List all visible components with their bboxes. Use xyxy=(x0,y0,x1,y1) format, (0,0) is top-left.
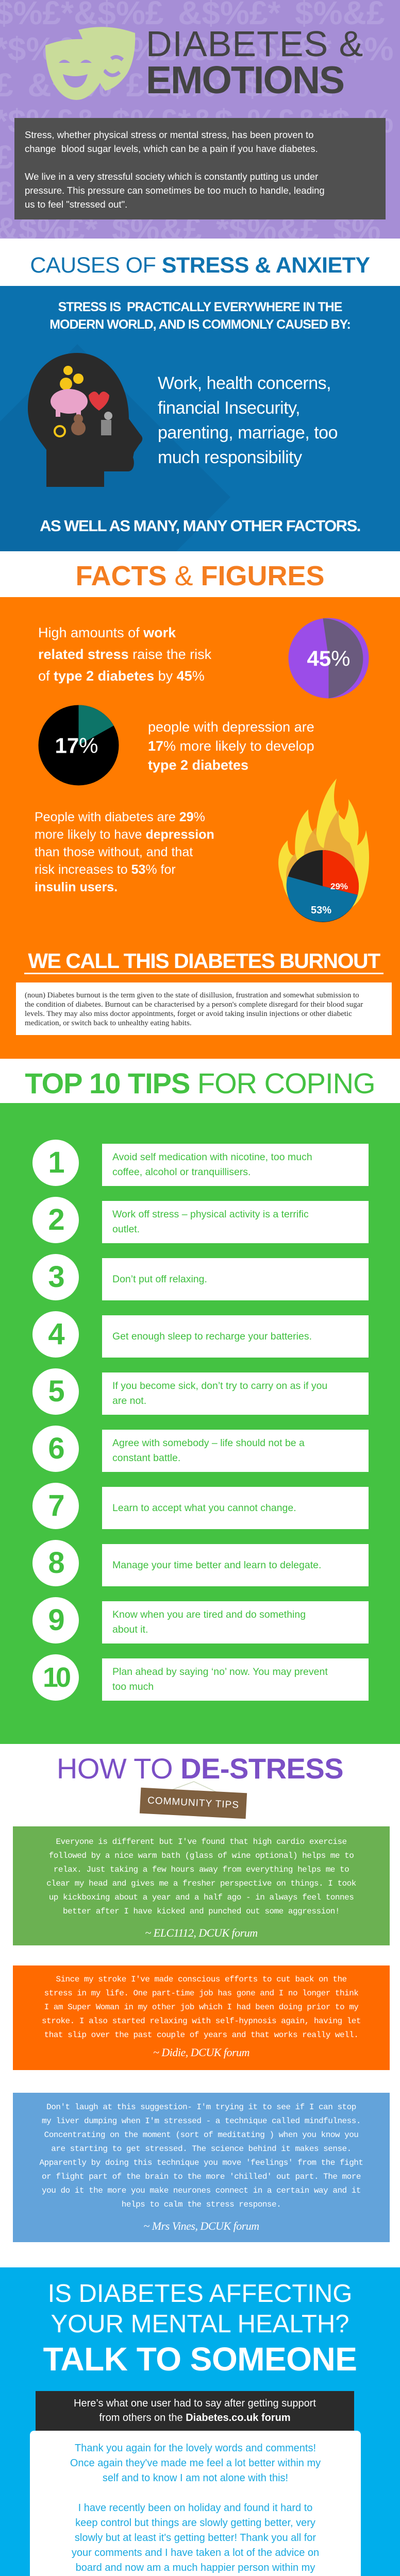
fact 2 text xyxy=(148,719,314,773)
tip 7: 7 xyxy=(48,1489,63,1522)
pie chart 17%: 17% xyxy=(55,734,98,757)
community tip: green: Everyone is different but I've found that high cardio exercise xyxy=(56,1837,347,1846)
text: causes list: much responsibility xyxy=(158,448,302,467)
community tip: orange: Since my stroke I've made conscious efforts to cut back on the xyxy=(56,1975,347,1984)
tip 9: Know when you are tired and do something xyxy=(112,1609,306,1620)
panel: talk to someone xyxy=(0,2267,400,2576)
tip 3 xyxy=(32,1254,369,1300)
speech bubble quote: board and now am a much happier person within my xyxy=(76,2562,315,2573)
intro text box: Stress, whether physical stress or mental stress, has been proven to xyxy=(25,129,313,140)
shadow xyxy=(0,344,230,650)
tip 9 xyxy=(32,1597,369,1643)
community tip: orange: stroke. I also started relaxing with self-hypnosis again, having let xyxy=(42,2016,361,2026)
heading: talk to someone: TALK TO SOMEONE xyxy=(43,2341,357,2378)
community tip: blue: or flight part of the brain to the more 'chilled' out part. The more xyxy=(42,2172,361,2181)
community tip: blue: Concentrating on the moment (sort of meditating ) when you know you xyxy=(44,2130,358,2140)
speech bubble quote: your comments and I have taken a lot of the advice on xyxy=(72,2547,319,2558)
tip 6: constant battle. xyxy=(112,1452,180,1464)
intro box: Here’s what one user had to say after getting support xyxy=(74,2398,316,2409)
community tip: green: clear my head and gives me a fresher perspective on things. I took xyxy=(46,1879,356,1888)
intro text box: We live in a very stressful society which is constantly putting us under xyxy=(25,171,318,182)
tip 5: If you become sick, don’t try to carry on as if you xyxy=(112,1380,327,1392)
subheading xyxy=(49,300,351,332)
community tip: green: ~ ELC1112, DCUK forum xyxy=(145,1926,258,1939)
subheading: MODERN WORLD, AND IS COMMONLY CAUSED BY: xyxy=(49,317,351,332)
community tip: orange: stress in my life. One part-time job has gone and I no longer think xyxy=(44,1989,358,1998)
tip 1: Avoid self medication with nicotine, too much xyxy=(112,1151,312,1163)
icon: head with worries xyxy=(28,353,142,487)
tip 4: Get enough sleep to recharge your batteries. xyxy=(112,1330,312,1342)
fact 1 text: High amounts of work xyxy=(38,625,176,640)
tip 6: Agree with somebody – life should not be a xyxy=(112,1437,305,1449)
fact 1 text: of type 2 diabetes by 45% xyxy=(38,668,205,684)
pie chart 45%: 45% xyxy=(307,646,351,671)
fact 1 text xyxy=(38,625,211,684)
community tip: blue: you do it the more you make neurones connect in a certain way and it xyxy=(42,2186,361,2195)
community tip: blue: Don't laugh at this suggestion- I'm trying it to see if I can stop xyxy=(46,2103,356,2112)
community tip: orange: ~ Didie, DCUK forum xyxy=(153,2046,249,2059)
tip 10 xyxy=(32,1654,369,1701)
heading: question: YOUR MENTAL HEALTH? xyxy=(51,2310,349,2338)
fact 3 text: more likely to have depression xyxy=(35,827,214,842)
sign: community tips xyxy=(139,1781,247,1819)
heading: question xyxy=(48,2280,352,2338)
definition box: (noun) Diabetes burnout is the term given to the state of disillusion, frustration and somewhat submission to xyxy=(25,991,359,999)
speech bubble quote: I have recently been on holiday and found it hard to xyxy=(78,2502,312,2514)
speech bubble quote xyxy=(30,2431,361,2576)
intro box xyxy=(36,2391,354,2431)
panel: causes xyxy=(0,286,400,551)
fact 3 text: risk increases to 53% for xyxy=(35,862,176,877)
tip 5: 5 xyxy=(48,1375,63,1408)
subheading: STRESS IS PRACTICALLY EVERYWHERE IN THE xyxy=(58,300,342,314)
icon: fire with pie chart: 29% xyxy=(330,882,348,891)
tip 6 xyxy=(32,1426,369,1472)
intro text box: us to feel "stressed out". xyxy=(25,199,127,210)
title xyxy=(146,24,363,101)
heading: how to de-stress: HOW TO DE-STRESS xyxy=(57,1752,343,1785)
community tip: green: relax. Just taking a few hours away from everything helps me to xyxy=(54,1865,349,1874)
heading: diabetes burnout: WE CALL THIS DIABETES BURNOUT xyxy=(28,949,380,973)
community tip: green: better after I have kicked and punched out some aggression! xyxy=(63,1907,340,1916)
community tip: blue: Apparently by doing this technique you move 'feelings' from the fight xyxy=(39,2158,363,2167)
tip 10: 10 xyxy=(43,1662,69,1693)
community tip: blue xyxy=(13,2093,390,2242)
tip 8 xyxy=(32,1540,369,1586)
community tip: orange: that slip over the past couple of years and that works really well. xyxy=(44,2030,358,2040)
community tip: blue: helps to calm the stress response. xyxy=(122,2200,281,2209)
tip 1: coffee, alcohol or tranquillisers. xyxy=(112,1166,251,1178)
tip 1: 1 xyxy=(48,1146,63,1179)
intro text box xyxy=(14,118,386,219)
icon: fire with pie chart xyxy=(278,778,369,922)
community tip: blue: ~ Mrs Vines, DCUK forum xyxy=(143,2219,259,2232)
community tip: blue: my liver dumping when I'm stressed - a technique called mindfulness. xyxy=(42,2116,361,2126)
text: causes list: parenting, marriage, too xyxy=(158,423,338,443)
title: EMOTIONS xyxy=(146,58,344,101)
tip 7 xyxy=(32,1483,369,1529)
speech bubble quote: self and to know I am not alone with this! xyxy=(103,2472,288,2484)
panel: tips xyxy=(0,1103,400,1744)
fact 3 text xyxy=(35,810,214,894)
tip 10: too much xyxy=(112,1681,154,1692)
speech bubble quote: slowly but at least it's getting better! Thank you all for xyxy=(75,2532,316,2544)
tip 2: outlet. xyxy=(112,1224,140,1235)
community tip: orange: I am Super Woman in my other job which I had been doing prior to my xyxy=(44,2003,358,2012)
community tip: blue: are starting to get stressed. The science behind it makes sense. xyxy=(51,2144,352,2154)
fact 3 text: insulin users. xyxy=(35,880,118,894)
speech bubble quote: Once again they've made me feel a lot better within my xyxy=(70,2458,321,2469)
definition box: levels. They may also miss doctor appointments, forget or avoid taking insulin injections or other diabetic xyxy=(25,1010,352,1018)
community tip: green: up kickboxing about a year and a half ago - in always feel tonnes xyxy=(49,1893,354,1902)
tip 10: Plan ahead by saying ‘no’ now. You may prevent xyxy=(112,1666,328,1677)
footer line: AS WELL AS MANY, MANY OTHER FACTORS. xyxy=(40,517,360,535)
fact 2 text: 17% more likely to develop xyxy=(148,738,314,754)
definition box: the condition of diabetes. Burnout can be characterised by a person's complete disregard for their blood sugar xyxy=(25,1001,363,1009)
fact 3 text: than those without, and that xyxy=(35,845,193,859)
intro box: from others on the Diabetes.co.uk forum xyxy=(99,2412,291,2424)
tip 2: Work off stress – physical activity is a terrific xyxy=(112,1209,309,1220)
sign: community tips: COMMUNITY TIPS xyxy=(147,1795,239,1811)
text: causes list xyxy=(158,374,338,467)
fact 2 text: people with depression are xyxy=(148,719,314,735)
tip 8: Manage your time better and learn to delegate. xyxy=(112,1559,321,1570)
heading: question: IS DIABETES AFFECTING xyxy=(48,2280,352,2308)
community tip: green: followed by a nice warm bath (glass of wine optional) helps me to xyxy=(49,1851,354,1860)
tip 3: 3 xyxy=(48,1260,63,1294)
heading: top 10 tips: TOP 10 TIPS FOR COPING xyxy=(25,1067,375,1099)
tip 8: 8 xyxy=(48,1546,63,1580)
speech bubble quote: Thank you again for the lovely words and comments! xyxy=(75,2443,316,2454)
text: causes list: financial Insecurity, xyxy=(158,398,300,418)
heading: facts & figures: FACTS & FIGURES xyxy=(75,561,325,591)
tip 2: 2 xyxy=(48,1203,63,1236)
heading: causes: CAUSES OF STRESS & ANXIETY xyxy=(30,253,370,278)
header panel xyxy=(0,0,400,239)
title: DIABETES & xyxy=(146,24,363,64)
tip 4: 4 xyxy=(48,1317,63,1351)
definition box xyxy=(16,982,392,1035)
tip 5: are not. xyxy=(112,1395,146,1406)
speech bubble quote: keep control but things are slowly getting better, very xyxy=(75,2517,315,2529)
tip 2 xyxy=(32,1197,369,1243)
intro text box: change blood sugar levels, which can be a pain if you have diabetes. xyxy=(25,143,318,154)
fact 3 text: People with diabetes are 29% xyxy=(35,810,205,824)
tip 7: Learn to accept what you cannot change. xyxy=(112,1502,296,1514)
tip 9: about it. xyxy=(112,1624,148,1635)
intro text box: pressure. This pressure can sometimes be too much to handle, leading xyxy=(25,185,325,196)
pie chart 17% xyxy=(38,705,119,785)
tip 6: 6 xyxy=(48,1432,63,1465)
tip 4 xyxy=(32,1311,369,1358)
tip 1 xyxy=(32,1140,369,1186)
tip 5 xyxy=(32,1368,369,1415)
pie chart 45% xyxy=(289,618,369,699)
tip 9: 9 xyxy=(48,1603,63,1637)
community tip: green xyxy=(13,1826,390,1945)
fact 2 text: type 2 diabetes xyxy=(148,757,248,773)
icon: fire with pie chart: 53% xyxy=(311,905,331,916)
text: causes list: Work, health concerns, xyxy=(158,374,331,393)
fact 1 text: related stress raise the risk xyxy=(38,647,211,662)
tip 3: Don’t put off relaxing. xyxy=(112,1274,207,1285)
community tip: orange xyxy=(13,1965,390,2070)
icon: theatre masks xyxy=(45,27,135,100)
definition box: medication, or switch back to unhealthy eating habits. xyxy=(25,1019,192,1027)
panel: facts xyxy=(0,597,400,1059)
